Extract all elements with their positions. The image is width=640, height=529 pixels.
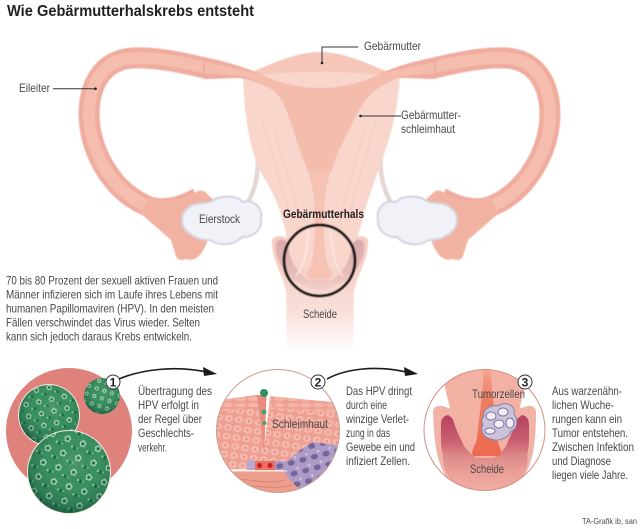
label: Eileiter: Eileiter	[19, 81, 50, 95]
vagina lower	[443, 454, 528, 486]
intro paragraph: Fällen verschwindet das Virus wieder. Selten	[6, 316, 200, 330]
label: Eileiter	[19, 81, 97, 95]
ligament right	[380, 150, 392, 204]
intro paragraph: kann sich jedoch daraus Krebs entwickeln.	[6, 330, 192, 344]
fallopian tube left	[89, 58, 205, 209]
label: Eierstock: Eierstock	[199, 212, 241, 226]
label: Schleimhaut: Schleimhaut	[272, 417, 329, 431]
intro paragraph: humanen Papillomaviren (HPV). In den meisten	[6, 302, 214, 316]
text step 3	[552, 384, 634, 482]
ovary right	[378, 197, 457, 244]
step number 2: 2	[315, 376, 322, 390]
vaginal wall	[433, 406, 536, 480]
tumour cell cluster	[482, 404, 517, 440]
text step 2: zung in das	[346, 426, 390, 440]
small virus	[84, 378, 120, 414]
connective tissue	[232, 472, 298, 492]
text step 1: HPV erfolgt in	[138, 398, 199, 412]
fallopian tube right	[434, 58, 550, 209]
text step 3: lichen Wuche-	[552, 398, 614, 412]
text step 2: infiziert Zellen.	[346, 454, 410, 468]
intro paragraph	[6, 274, 219, 344]
infected red cells	[255, 461, 275, 470]
text step 2: winzige Verlet-	[345, 412, 409, 426]
dark fornix left	[441, 415, 476, 458]
vagina	[272, 236, 368, 352]
text step 2: durch eine	[346, 398, 387, 412]
title: Wie Gebärmutterhalskrebs entsteht	[7, 3, 255, 20]
text step 3: und Diagnose	[552, 454, 611, 468]
tube taper rim right	[366, 57, 436, 90]
arrow 2 to 3	[327, 367, 418, 379]
cervical canal	[472, 365, 501, 456]
tissue cells	[217, 395, 339, 469]
text step 2: Gewebe ein und	[346, 440, 415, 454]
uterus dome	[250, 52, 390, 90]
panel 3: cervix with tumour	[424, 365, 545, 492]
intro paragraph: Männer infizieren sich im Laufe ihres Lebens mit	[6, 288, 219, 302]
step number 1	[106, 375, 120, 390]
infected purple cells	[275, 442, 338, 488]
tissue waves	[240, 478, 292, 488]
cervical canal	[306, 170, 333, 279]
uterine cavity funnel	[205, 62, 434, 172]
arrow 1 to 2	[119, 367, 217, 379]
ovary left	[182, 197, 261, 244]
label: Gebärmutter	[321, 39, 421, 64]
fornix pockets	[276, 240, 364, 291]
wound slit red	[257, 395, 266, 451]
panel 2: mucosa tissue	[212, 370, 342, 500]
body striations	[262, 120, 376, 222]
cervix lobe highlight	[296, 225, 343, 276]
text step 1	[138, 384, 212, 454]
text step 3: Aus warzenähn-	[552, 384, 622, 398]
label: Gebärmutter: Gebärmutter	[364, 39, 421, 53]
wound slit white	[264, 395, 270, 445]
text step 2	[345, 384, 415, 468]
basal line	[230, 469, 285, 472]
medium virus	[18, 384, 80, 446]
upper flat cell layer	[220, 395, 336, 414]
virus particles	[260, 389, 268, 425]
tube taper rim left	[203, 57, 273, 90]
label: Gebärmutterhals: Gebärmutterhals	[283, 207, 364, 221]
label: Gebärmutterschleimhaut: Gebärmutter-	[401, 108, 461, 122]
label: Tumorzellen: Tumorzellen	[472, 387, 525, 401]
lining lens	[262, 72, 380, 88]
text step 2: Das HPV dringt	[346, 384, 413, 398]
text step 1: der Regel über	[138, 412, 202, 426]
intro paragraph: 70 bis 80 Prozent der sexuell aktiven Frauen und	[6, 274, 218, 288]
text step 1: verkehr.	[138, 440, 167, 454]
uterus body	[243, 75, 400, 268]
label: Scheide: Scheide	[303, 307, 337, 321]
label: Gebärmutterschleimhaut: schleimhaut	[401, 122, 456, 136]
text step 3: rungen kann ein	[552, 412, 622, 426]
panel 1: HPV viruses	[6, 368, 132, 514]
step number 1: 1	[110, 376, 117, 390]
label: Scheide: Scheide	[470, 462, 504, 476]
cervix highlight circle	[284, 225, 355, 296]
uterus anatomy illustration	[89, 52, 550, 352]
cervix body	[444, 370, 524, 441]
fimbriae right	[419, 190, 499, 260]
text step 1: Übertragung des	[138, 384, 212, 398]
text step 1: Geschlechts-	[138, 426, 194, 440]
ligament left	[247, 155, 258, 204]
fimbriae left	[140, 190, 220, 260]
label: Gebärmutterschleimhaut	[359, 108, 461, 136]
dark fornix right	[494, 415, 529, 458]
purple basal cell	[247, 460, 255, 470]
large virus	[27, 430, 111, 514]
step number 3: 3	[522, 376, 529, 390]
